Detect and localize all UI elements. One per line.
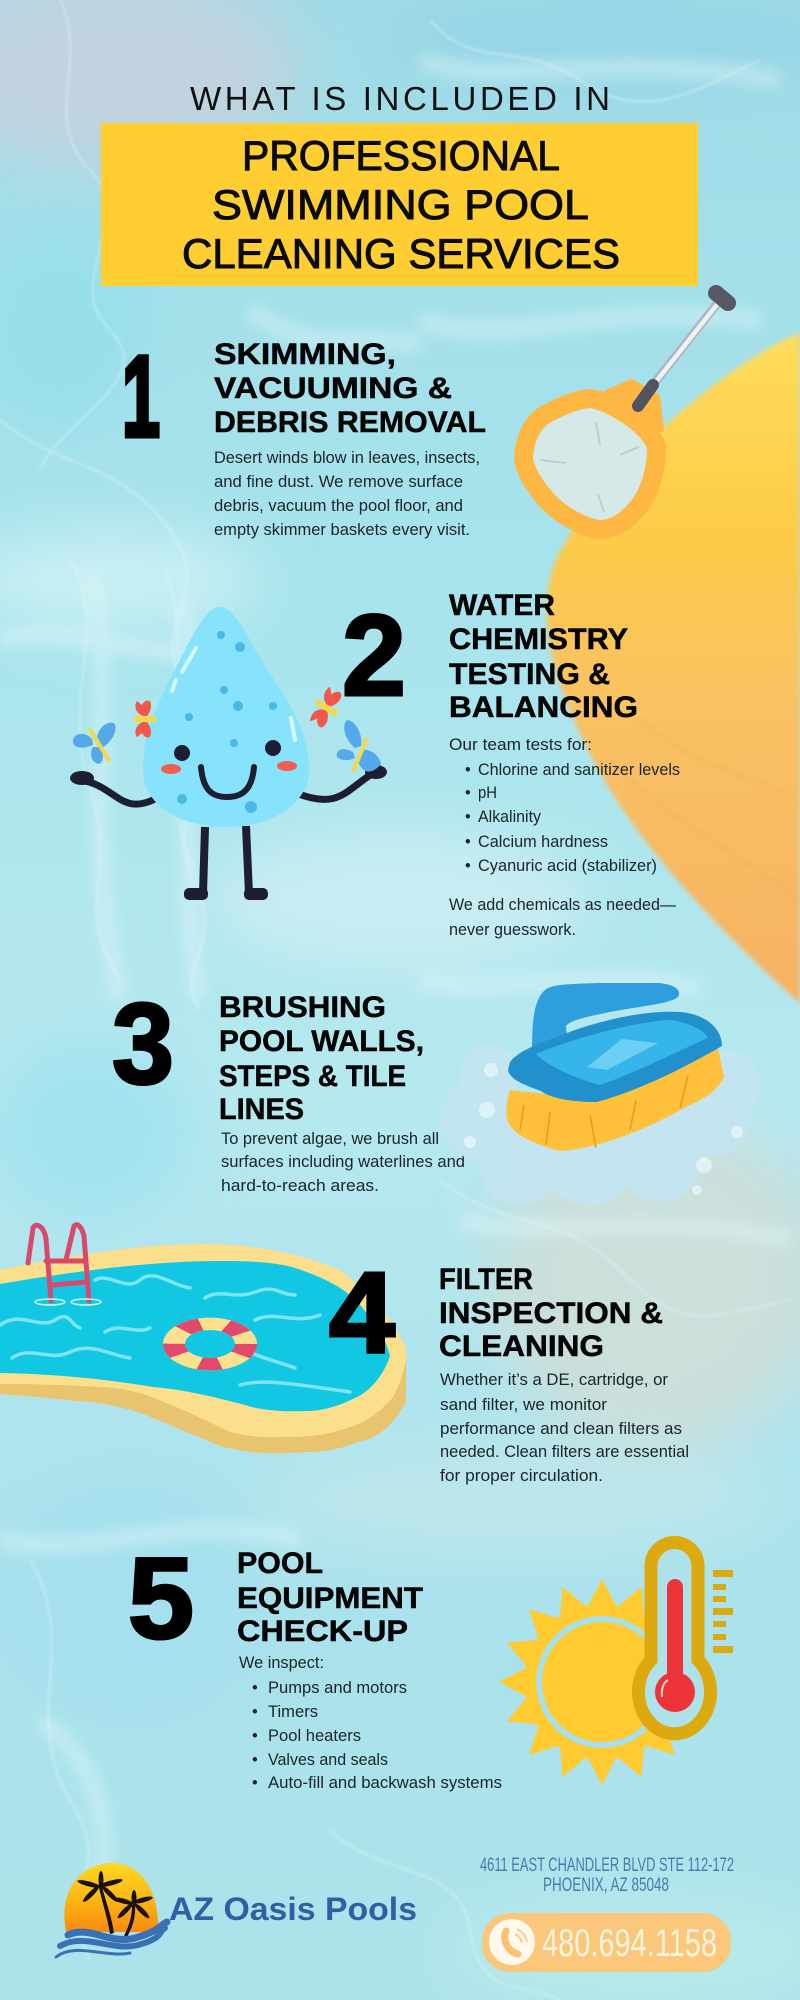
step 4 panel — [0, 1225, 689, 1485]
text 2: tests list: • — [465, 761, 471, 779]
text 1: and fine dust. We remove surface — [214, 473, 463, 491]
butterfly red left — [134, 700, 156, 738]
number 3: 3 — [112, 980, 174, 1108]
text 2: tests list: We add chemicals as needed— — [449, 896, 677, 914]
text 5: inspection list: Pumps and motors — [268, 1679, 407, 1697]
text 2: tests list: pH — [478, 784, 497, 802]
text 1: empty skimmer baskets every visit. — [214, 521, 470, 539]
logo sun — [64, 1863, 158, 1932]
heading 1: DEBRIS REMOVAL — [214, 406, 486, 439]
heading 2: TESTING & — [449, 658, 610, 691]
text 1: Desert winds blow in leaves, insects, — [214, 449, 480, 467]
heading 3 — [219, 991, 424, 1126]
phone number: 480.694.1158 — [542, 1922, 717, 1965]
heading 4: FILTER — [439, 1263, 533, 1296]
main heading: SWIMMING POOL — [212, 181, 589, 228]
step 2 panel — [70, 589, 680, 939]
text 2: tests list: Alkalinity — [478, 808, 542, 826]
text 4 — [440, 1371, 689, 1485]
logo waves — [56, 1922, 167, 1957]
main heading: CLEANING SERVICES — [182, 230, 620, 277]
icon: pool skimmer — [533, 293, 728, 520]
text 2: tests list: • — [465, 808, 471, 826]
text 3: To prevent algae, we brush all — [221, 1130, 439, 1148]
text 2: tests list: • — [465, 784, 471, 802]
heading 2: CHEMISTRY — [449, 623, 628, 656]
text 2: tests list: Our team tests for: — [449, 736, 592, 754]
text 5: inspection list: • — [252, 1751, 258, 1769]
text 2: tests list: • — [465, 857, 471, 875]
text 2: tests list: Chlorine and sanitizer levels — [478, 761, 680, 779]
text 3: hard-to-reach areas. — [221, 1177, 379, 1195]
decorative beach ball — [547, 333, 800, 1003]
text 4: for proper circulation. — [440, 1467, 603, 1485]
logo: AZ Oasis Pools — [56, 1863, 417, 1957]
butterfly blue right — [337, 720, 381, 772]
phone button — [482, 1913, 731, 1972]
text 3 — [221, 1130, 465, 1195]
heading 5 — [237, 1547, 423, 1648]
heading 3: BRUSHING — [219, 991, 386, 1024]
heading 3: LINES — [219, 1093, 304, 1126]
step 1 panel — [122, 293, 728, 539]
text 5: inspection list: • — [252, 1774, 258, 1792]
address: PHOENIX, AZ 85048 — [543, 1875, 669, 1896]
text 4: sand filter, we monitor — [440, 1396, 608, 1414]
main heading — [182, 132, 620, 277]
text 3: surfaces including waterlines and — [221, 1153, 465, 1171]
heading 4: INSPECTION & — [439, 1297, 663, 1330]
heading 1 — [214, 338, 486, 439]
text 4: Whether it’s a DE, cartridge, or — [440, 1371, 669, 1389]
step 5 panel — [128, 1535, 733, 1792]
text 2: tests list: Cyanuric acid (stabilizer) — [478, 857, 657, 875]
heading 2: WATER — [449, 589, 555, 622]
text 5: inspection list: Timers — [268, 1703, 318, 1721]
text 1: debris, vacuum the pool floor, and — [214, 497, 463, 515]
heading 5: EQUIPMENT — [237, 1582, 423, 1615]
title — [101, 80, 698, 286]
heading 3: STEPS & TILE — [219, 1060, 406, 1093]
text 5: inspection list: • — [252, 1703, 258, 1721]
text 5: inspection list: • — [252, 1727, 258, 1745]
text 5: inspection list: Valves and seals — [268, 1751, 388, 1769]
icon: water drop character — [70, 607, 387, 900]
text 2: tests list: Calcium hardness — [478, 833, 608, 851]
butterfly red right — [307, 685, 347, 731]
text 2: tests list: never guesswork. — [449, 921, 576, 939]
number 5: 5 — [128, 1535, 194, 1663]
text 4: needed. Clean filters are essential — [440, 1443, 689, 1461]
icon: scrub brush with foam — [440, 983, 760, 1206]
heading 4: CLEANING — [439, 1330, 604, 1363]
logo wordmark: AZ Oasis Pools — [169, 1891, 417, 1927]
title banner — [101, 123, 698, 286]
text 5: inspection list: • — [252, 1679, 258, 1697]
subtitle: what is included in: WHAT IS INCLUDED IN — [190, 80, 610, 117]
text 5: inspection list: We inspect: — [239, 1654, 324, 1672]
heading 2: BALANCING — [449, 691, 638, 724]
text 2: tests list — [449, 736, 680, 939]
number 2: 2 — [342, 592, 406, 720]
step 3 panel — [112, 980, 760, 1206]
text 5: inspection list: Pool heaters — [268, 1727, 361, 1745]
text 4: performance and clean filters as — [440, 1420, 682, 1438]
address — [480, 1855, 734, 1896]
icon: sun and thermometer — [499, 1542, 733, 1785]
text 5: inspection list — [239, 1654, 502, 1792]
text 1 — [214, 449, 480, 539]
logo palm trees — [77, 1871, 153, 1937]
heading 5: POOL — [237, 1547, 323, 1580]
heading 2 — [449, 589, 638, 724]
heading 1: VACUUMING & — [214, 372, 452, 405]
number 4: 4 — [329, 1249, 395, 1377]
heading 3: POOL WALLS, — [219, 1025, 424, 1058]
number 1: 1 — [122, 333, 160, 461]
icon: phone — [489, 1919, 535, 1965]
text 2: tests list: • — [465, 833, 471, 851]
main heading: PROFESSIONAL — [242, 132, 560, 179]
heading 5: CHECK-UP — [237, 1615, 408, 1648]
icon: swimming pool — [0, 1225, 406, 1453]
text 5: inspection list: Auto-fill and backwash systems — [268, 1774, 502, 1792]
swim ring — [174, 1324, 246, 1364]
heading 4 — [439, 1263, 663, 1363]
butterfly blue left — [73, 723, 116, 764]
heading 1: SKIMMING, — [214, 338, 396, 371]
